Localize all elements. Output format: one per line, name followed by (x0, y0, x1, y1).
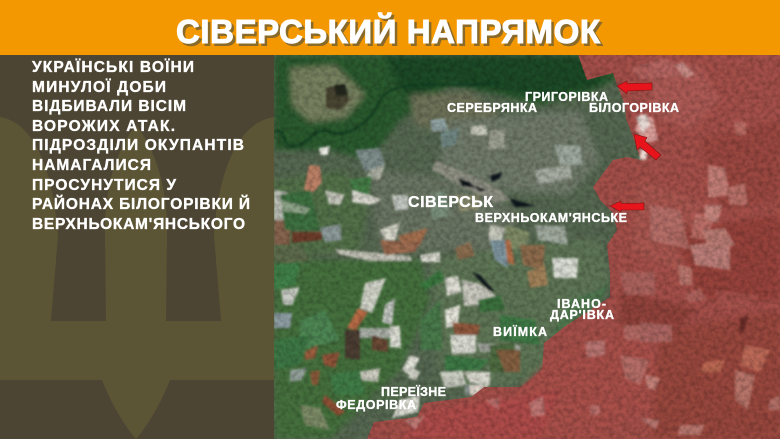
label: Fedorivka: ФЕДОРІВКА (336, 398, 416, 412)
label: Hryhorivka: ГРИГОРІВКА (525, 90, 608, 104)
title shadow: СІВЕРСЬКИЙ НАПРЯМОК (178, 14, 603, 52)
title: СІВЕРСЬКИЙ НАПРЯМОК (176, 12, 601, 50)
map texture (274, 55, 780, 439)
title banner (0, 0, 780, 55)
body text: УКРАЇНСЬКІ ВОЇНИ (32, 59, 194, 76)
label: Pereizne: ПЕРЕЇЗНЕ (381, 384, 446, 399)
label: Ivano-Darivka: ІВАНО- (557, 297, 606, 311)
label: Viimka: ВИЇМКА (493, 324, 547, 339)
body text: МИНУЛОЇ ДОБИ (32, 79, 166, 96)
label: Verkhnokamianske: ВЕРХНЬОКАМ'ЯНСЬКЕ (475, 211, 627, 225)
body text: РАЙОНАХ БІЛОГОРІВКИ Й (32, 195, 250, 213)
arrow: Hryhorivka (617, 81, 652, 94)
body text: ВІДБИВАЛИ ВІСІМ (32, 98, 186, 115)
arrow: Verkhnokamianske (610, 201, 644, 212)
map labels (336, 90, 679, 412)
body text: ПІДРОЗДІЛИ ОКУПАНТІВ (32, 137, 244, 154)
label: Siversk: СІВЕРСЬК (408, 194, 493, 211)
body text: НАМАГАЛИСЯ (32, 157, 151, 174)
label: Bilohorivka: БІЛОГОРІВКА (589, 101, 679, 115)
panel: text background with trident (0, 55, 274, 439)
body text: ВОРОЖИХ АТАК. (32, 118, 175, 135)
label: Darivka second line: ДАР'ІВКА (550, 308, 614, 322)
map: occupied territory red overlay (367, 55, 780, 439)
arrow: Bilohorivka (634, 134, 661, 160)
map: satellite base (274, 55, 641, 439)
body text: ПРОСУНУТИСЯ У (32, 177, 176, 194)
body text: ВЕРХНЬОКАМ'ЯНСЬКОГО (32, 216, 245, 233)
body text (32, 59, 250, 233)
label: Serebrianka: СЕРЕБРЯНКА (447, 101, 537, 115)
